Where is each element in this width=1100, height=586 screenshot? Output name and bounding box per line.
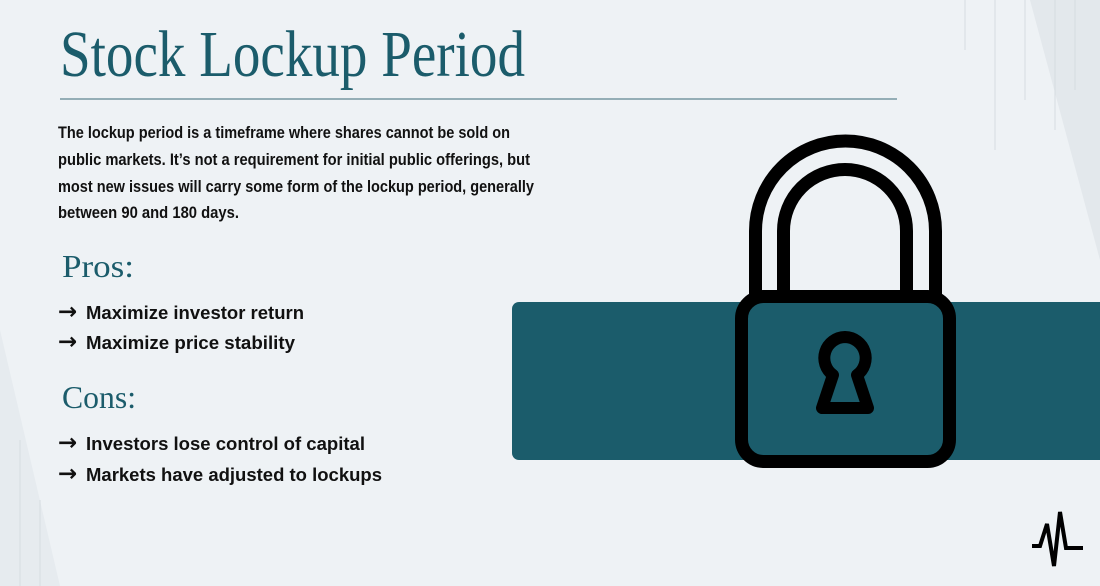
intro paragraph: between 90 and 180 days. (58, 203, 239, 222)
intro paragraph: The lockup period is a timeframe where shares cannot be sold on (58, 123, 510, 142)
pros list: Maximize price stability (86, 333, 295, 353)
cons list: → (58, 461, 77, 487)
pros list (58, 299, 304, 355)
intro paragraph: most new issues will carry some form of the lockup period, generally (58, 177, 534, 196)
pros list: → (58, 329, 77, 355)
cons list: → (58, 430, 77, 456)
intro paragraph: public markets. It’s not a requirement for initial public offerings, but (58, 150, 530, 169)
pros list: → (58, 299, 77, 325)
logo (1032, 512, 1083, 566)
cons list: Investors lose control of capital (86, 434, 365, 454)
title: Stock Lockup Period (60, 18, 525, 91)
cons list (58, 430, 382, 487)
cons list: Markets have adjusted to lockups (86, 465, 382, 485)
intro paragraph (58, 123, 534, 222)
pros list: Maximize investor return (86, 303, 304, 323)
teal band (512, 302, 1100, 460)
pros heading: Pros: (62, 248, 134, 284)
icon: padlock (742, 141, 950, 462)
cons heading: Cons: (62, 379, 136, 415)
